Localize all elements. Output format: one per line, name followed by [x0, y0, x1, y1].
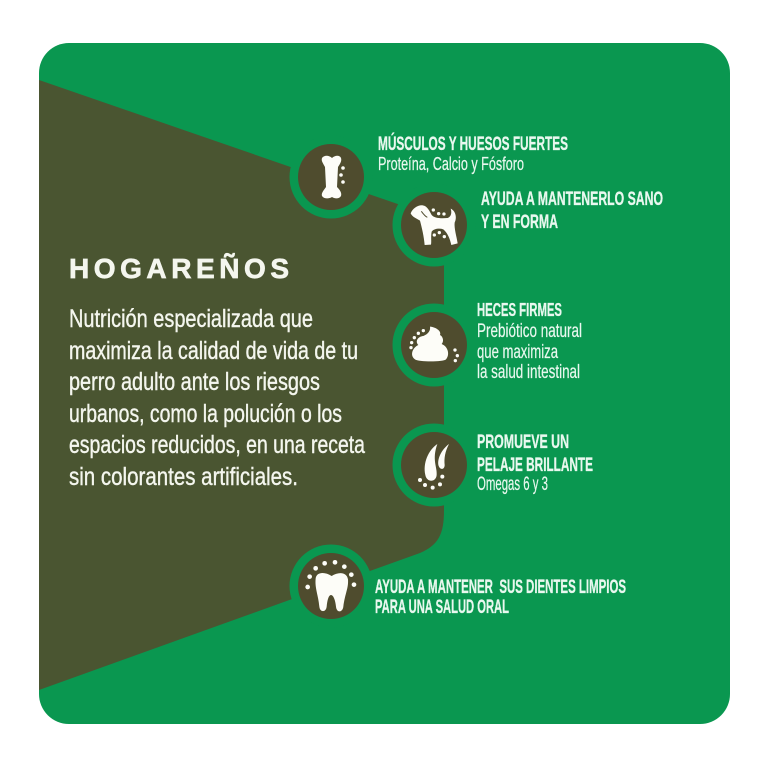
text block: healthy and fit — [481, 189, 663, 233]
icon: dog — [392, 184, 476, 266]
text block: firm stools — [477, 300, 582, 383]
text block: healthy and fit: AYUDA A MANTENERLO SANO — [481, 189, 663, 210]
icon: bone — [290, 136, 372, 218]
text block: shiny coat: Omegas 6 y 3 — [477, 474, 548, 495]
text block: clean teeth: PARA UNA SALUD ORAL — [375, 597, 509, 618]
text block: firm stools: que maximiza — [477, 342, 558, 363]
text block: firm stools: HECES FIRMES — [477, 300, 562, 320]
text block: firm stools: la salud intestinal — [477, 362, 580, 383]
text block: healthy and fit: Y EN FORMA — [481, 212, 558, 233]
text block: description: perro adulto ante los riesgos — [69, 368, 320, 396]
text block: muscles and bones: MÚSCULOS Y HUESOS FUERTES — [378, 133, 568, 155]
text block: firm stools: Prebiótico natural — [477, 321, 582, 342]
panel: olive shape — [39, 80, 444, 690]
text block: muscles and bones: Proteína, Calcio y Fósforo — [378, 154, 524, 174]
panel: green background — [39, 43, 730, 724]
text block: description: urbanos, como la polución o los — [69, 400, 342, 428]
text block: shiny coat — [477, 432, 593, 495]
text block: description: maximiza la calidad de vida de tu — [69, 337, 358, 365]
text block: description — [69, 305, 365, 491]
text block: muscles and bones — [378, 133, 568, 174]
icon: stool — [392, 304, 476, 386]
icon: hair — [392, 424, 476, 506]
text block: shiny coat: PROMUEVE UN — [477, 432, 569, 453]
text block: description: Nutrición especializada que — [69, 305, 313, 333]
text block: clean teeth — [375, 577, 626, 618]
icon: tooth — [290, 544, 372, 628]
text block: shiny coat: PELAJE BRILLANTE — [477, 455, 593, 476]
text block: description: espacios reducidos, en una receta — [69, 431, 365, 459]
text block: description: sin colorantes artificiales. — [69, 463, 298, 491]
heading: Hogareños: HOGAREÑOS — [69, 253, 289, 284]
